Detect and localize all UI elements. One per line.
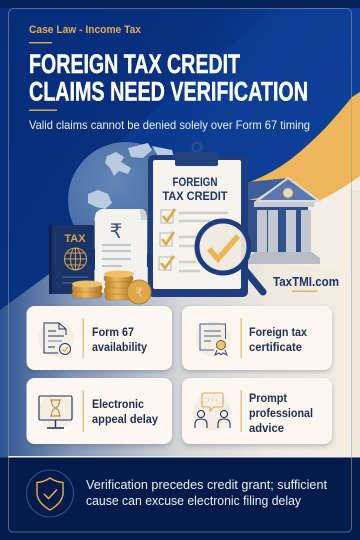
illustration: bank building: [248, 178, 320, 264]
icon: monitor with hourglass: [39, 396, 72, 428]
card: Foreign tax certificate: [182, 306, 332, 370]
illustration: clipboard: [148, 142, 248, 297]
brand: TaxTMI.com: TaxTMI.com: [273, 274, 339, 289]
icon: document with check: [44, 323, 70, 354]
card: Prompt professional advice: Prompt: [249, 393, 287, 405]
illustration: receipt: [95, 209, 147, 296]
footer panel: [0, 458, 360, 540]
icon: certificate with ribbon: [200, 324, 227, 355]
footer takeaway text: cause can excuse electronic filing delay: [86, 494, 302, 508]
illustration: passport: [49, 225, 94, 294]
title: [29, 49, 308, 106]
card: Electronic appeal delay: [26, 378, 172, 444]
card: Form 67 availability: availability: [92, 342, 148, 354]
icon: shield with check: [26, 470, 74, 517]
eyebrow rule: [29, 42, 52, 43]
subtitle: Valid claims cannot be denied solely over Form 67 timing: [29, 118, 310, 132]
footer takeaway text: [86, 478, 328, 508]
illustration: receipt: ₹: [110, 219, 122, 243]
card: Form 67 availability: Form 67: [92, 327, 134, 339]
card: Foreign tax certificate: Foreign tax: [249, 327, 308, 339]
card: Foreign tax certificate: certificate: [249, 342, 302, 354]
title: FOREIGN TAX CREDIT: [29, 49, 240, 79]
eyebrow: case law label: Case Law - Income Tax: [29, 24, 142, 36]
icon: two people with speech bubble: [195, 393, 230, 428]
illustration: clipboard: TAX CREDIT: [162, 191, 228, 203]
card: Prompt professional advice: [182, 378, 332, 444]
footer takeaway text: Verification precedes credit grant; sufficient: [86, 478, 328, 492]
illustration: gold coins: [72, 270, 151, 304]
card: Prompt professional advice: advice: [249, 423, 284, 435]
illustration: globe: [68, 142, 184, 258]
card: Prompt professional advice: professional: [249, 408, 313, 420]
illustration: clipboard: FOREIGN: [172, 177, 218, 189]
card: Electronic appeal delay: appeal delay: [92, 414, 159, 426]
card: Electronic appeal delay: Electronic: [92, 399, 145, 411]
title rule: [29, 110, 57, 111]
card: Form 67 availability: [26, 306, 172, 370]
illustration: passport: TAX: [64, 233, 86, 245]
illustration: gold coins: ₹: [135, 286, 143, 301]
illustration: magnifier: [197, 221, 263, 292]
